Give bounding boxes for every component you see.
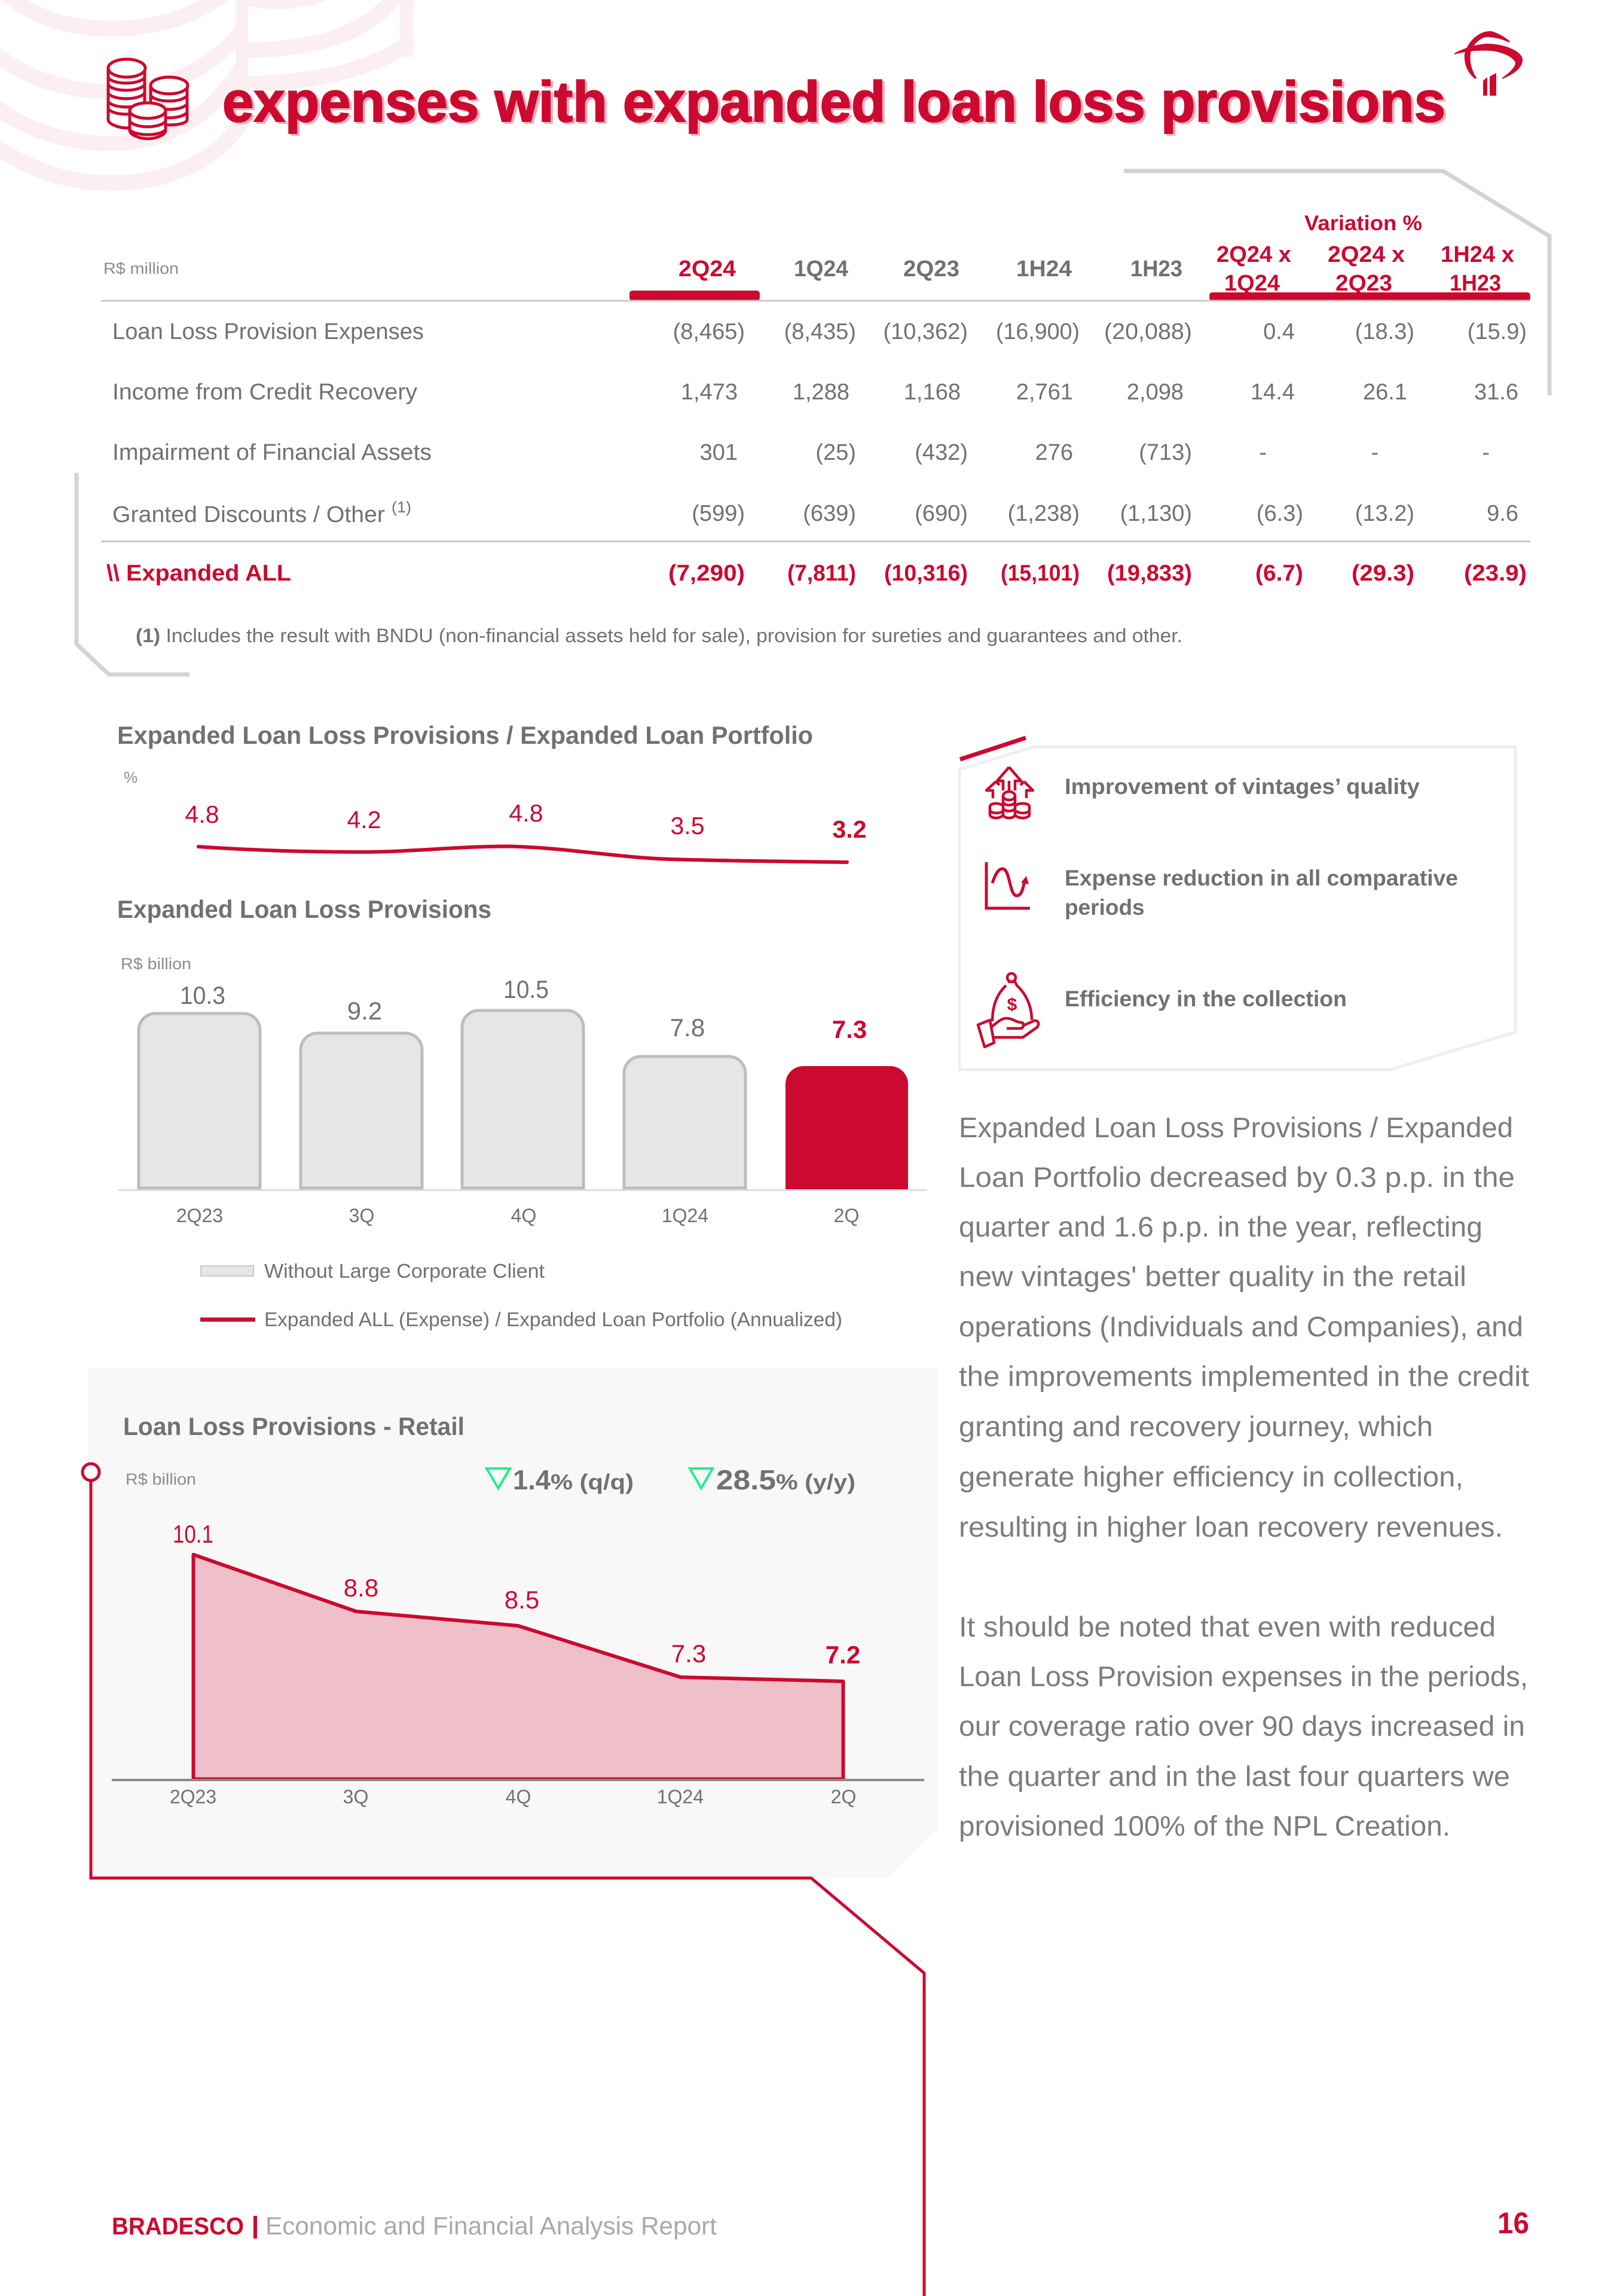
row: loan loss provision expenses: (20,088)	[1104, 319, 1192, 344]
row: loan loss provision expenses: (16,900)	[996, 319, 1080, 344]
row: loan loss provision expenses: (8,435)	[784, 319, 856, 344]
row: income from credit recovery: 14.4	[1251, 380, 1295, 405]
bar chart: expanded loan loss provisions: R$ billion	[121, 955, 191, 973]
text block: analysis paragraph one: Expanded Loan Loss Provisions / Expanded	[959, 1112, 1513, 1143]
text block: analysis paragraph one: quarter and 1.6 p.p. in the year, reflecting	[959, 1211, 1483, 1242]
bar chart: expanded loan loss provisions: 10.5	[503, 975, 549, 1003]
row: income from credit recovery: Income from Credit Recovery	[112, 380, 417, 405]
logo: Bradesco tree mark	[1454, 31, 1523, 96]
chart heading: expanded loan loss provisions: Expanded Loan Loss Provisions	[117, 895, 491, 923]
variation q/q: 1.4	[513, 1464, 551, 1495]
area chart: retail provisions: 2Q23	[170, 1786, 216, 1808]
row: impairment of financial assets: Impairment of Financial Assets	[112, 440, 432, 465]
area chart: retail provisions	[112, 1520, 924, 1808]
row: loan loss provision expenses: Loan Loss Provision Expenses	[112, 319, 424, 344]
row: granted discounts / other: (639)	[803, 501, 856, 526]
row: granted discounts / other	[112, 498, 1518, 527]
legend: Without Large Corporate Client	[264, 1260, 545, 1282]
table header: 1H23	[1130, 257, 1182, 282]
text block: analysis paragraph one: Loan Portfolio decreased by 0.3 p.p. in the	[959, 1161, 1515, 1193]
bar chart: expanded loan loss provisions: 7.3	[832, 1015, 867, 1043]
area chart: retail provisions: 3Q	[343, 1786, 368, 1808]
line chart: ratio percent: 4.2	[347, 806, 381, 833]
table header: 2Q23	[903, 257, 959, 282]
footer: Economic and Financial Analysis Report	[265, 2212, 717, 2240]
area chart: retail provisions: 4Q	[506, 1786, 531, 1808]
row: income from credit recovery: 31.6	[1474, 380, 1518, 405]
text block: analysis paragraph one: operations (Individuals and Companies), and	[959, 1311, 1523, 1342]
area chart: retail provisions: 10.1	[173, 1520, 213, 1548]
decorative grey corner frame, bottom left	[77, 473, 189, 674]
row: loan loss provision expenses: (18.3)	[1355, 319, 1414, 344]
row: granted discounts / other: 9.6	[1487, 501, 1518, 526]
row: income from credit recovery: 1,288	[793, 380, 849, 405]
text: improvement of vintages' quality: Improvement of vintages’ quality	[1065, 774, 1420, 799]
row: income from credit recovery: 1,473	[681, 380, 738, 405]
text block: analysis paragraph one: the improvements implemented in the credit	[959, 1360, 1529, 1392]
chart heading: provisions over portfolio: Expanded Loan Loss Provisions / Expanded Loan Portfolio	[117, 721, 813, 749]
row: expanded ALL total: (23.9)	[1464, 561, 1527, 586]
text block: analysis paragraph one: granting and recovery journey, which	[959, 1410, 1433, 1442]
area chart: retail provisions: 8.5	[505, 1586, 539, 1614]
panel: loan loss provisions retail	[88, 1368, 939, 1878]
line chart: ratio percent	[124, 768, 867, 862]
row: granted discounts / other: (599)	[692, 501, 745, 526]
row: impairment of financial assets: 301	[700, 440, 738, 465]
red connector line with circle marker	[82, 1464, 924, 2296]
text block: analysis paragraph two: provisioned 100% of the NPL Creation.	[959, 1810, 1450, 1842]
row: impairment of financial assets: -	[1259, 440, 1267, 465]
footnote: (1) Includes the result with BNDU (non-financial assets held for sale), provision for sureties and guarantees and other.	[136, 625, 1182, 646]
row: income from credit recovery: 1,168	[904, 380, 961, 405]
decorative grey corner frame, top right	[1124, 171, 1549, 395]
bar chart: expanded loan loss provisions: 1Q24	[662, 1205, 708, 1226]
text block: analysis paragraph two: It should be noted that even with reduced	[959, 1611, 1496, 1642]
variation y/y	[690, 1464, 855, 1495]
row: granted discounts / other: (1)	[392, 498, 411, 516]
row: granted discounts / other: (13.2)	[1355, 501, 1414, 526]
row: expanded ALL total: \\ Expanded ALL	[106, 561, 291, 586]
line chart: ratio percent: 3.2	[832, 816, 867, 843]
line chart: ratio percent: 3.5	[671, 812, 704, 839]
row: granted discounts / other: Granted Discounts / Other	[112, 502, 385, 527]
text block: analysis paragraph one	[959, 1112, 1529, 1543]
row: expanded ALL total: (10,316)	[884, 561, 968, 586]
text block: analysis paragraph one: generate higher efficiency in collection,	[959, 1461, 1463, 1492]
variation y/y: % (y/y)	[776, 1470, 855, 1494]
bar chart: expanded loan loss provisions: 3Q	[349, 1205, 374, 1226]
icon: stacks of coins	[108, 59, 188, 139]
row: impairment of financial assets: 276	[1035, 440, 1073, 465]
row: impairment of financial assets: (713)	[1139, 440, 1192, 465]
table header: 1H24 x	[1441, 242, 1514, 267]
footer: BRADESCO	[112, 2212, 244, 2240]
text: expense reduction: periods	[1065, 895, 1145, 920]
table header: 2Q24	[678, 257, 736, 282]
bar chart: expanded loan loss provisions: 2Q	[834, 1205, 859, 1226]
row: granted discounts / other: (1,130)	[1120, 501, 1192, 526]
table header: 2Q24 x	[1216, 242, 1291, 267]
table: expanded loan loss provision expenses	[101, 212, 1530, 646]
row: expanded ALL total: (6.7)	[1255, 561, 1303, 586]
row: impairment of financial assets: -	[1482, 440, 1490, 465]
row: loan loss provision expenses: (15.9)	[1468, 319, 1527, 344]
text block: analysis paragraph one: resulting in higher loan recovery revenues.	[959, 1511, 1503, 1543]
row: expanded ALL total: (7,290)	[668, 561, 745, 586]
legend: Expanded ALL (Expense) / Expanded Loan Portfolio (Annualized)	[264, 1308, 842, 1330]
title: expenses with expanded loan loss provisions	[222, 70, 1445, 134]
variation y/y: 28.5	[716, 1464, 776, 1495]
row: impairment of financial assets	[112, 440, 1490, 465]
table header	[101, 212, 1530, 301]
row: impairment of financial assets: -	[1371, 440, 1378, 465]
bar chart: expanded loan loss provisions	[118, 955, 927, 1226]
text: efficiency in the collection: Efficiency in the collection	[1065, 987, 1347, 1011]
row: loan loss provision expenses: (10,362)	[883, 319, 968, 344]
page number: 16	[1497, 2206, 1529, 2240]
icon: coins with up arrows	[986, 767, 1033, 818]
text block: analysis paragraph two: Loan Loss Provision expenses in the periods,	[959, 1660, 1528, 1692]
row: expanded ALL total: (29.3)	[1352, 561, 1414, 586]
table header: 2Q23	[1335, 271, 1392, 296]
row: income from credit recovery: 2,098	[1127, 380, 1184, 405]
legend	[200, 1260, 842, 1330]
row: loan loss provision expenses	[112, 319, 1527, 344]
table header: 1H24	[1016, 257, 1072, 282]
icon: line chart with rebound arrow	[986, 862, 1030, 908]
heading: retail: Loan Loss Provisions - Retail	[123, 1412, 464, 1440]
variation q/q: % (q/q)	[551, 1470, 634, 1494]
text block: analysis paragraph one: new vintages' better quality in the retail	[959, 1260, 1466, 1292]
row: loan loss provision expenses: 0.4	[1263, 319, 1295, 344]
text block: analysis paragraph two	[959, 1611, 1528, 1842]
row: impairment of financial assets: (25)	[815, 440, 856, 465]
area chart: retail provisions: 8.8	[344, 1574, 378, 1602]
row: expanded ALL total: (19,833)	[1107, 561, 1192, 586]
row: expanded ALL total: (7,811)	[787, 561, 856, 586]
area chart: retail provisions: 7.3	[671, 1639, 706, 1668]
table header: Variation %	[1304, 212, 1422, 235]
table header: 1Q24	[794, 257, 848, 282]
row: impairment of financial assets: (432)	[915, 440, 968, 465]
icon: money bag over open hand	[978, 973, 1038, 1047]
background decoration: pale coin stack arcs	[0, 0, 406, 183]
row: expanded ALL total: (15,101)	[1001, 561, 1080, 586]
unit label: R$ billion	[126, 1470, 196, 1488]
table header: 1H23	[1450, 271, 1501, 296]
table header: 1Q24	[1224, 271, 1280, 296]
line chart: ratio percent: 4.8	[509, 799, 543, 827]
row: granted discounts / other: (6.3)	[1257, 501, 1303, 526]
bar chart: expanded loan loss provisions: 7.8	[670, 1013, 705, 1042]
row: expanded ALL total	[106, 561, 1527, 586]
text: expense reduction: Expense reduction in all comparative	[1065, 866, 1458, 890]
area chart: retail provisions: 1Q24	[657, 1786, 704, 1808]
bar chart: expanded loan loss provisions: 2Q23	[176, 1205, 223, 1226]
area chart: retail provisions: 7.2	[826, 1641, 860, 1669]
row: income from credit recovery: 2,761	[1016, 380, 1073, 405]
line chart: ratio percent: 4.8	[185, 801, 219, 828]
text block: analysis paragraph two: our coverage ratio over 90 days increased in	[959, 1710, 1525, 1742]
line chart: ratio percent: %	[124, 768, 137, 786]
row: loan loss provision expenses: (8,465)	[673, 319, 745, 344]
table header: R$ million	[103, 259, 179, 277]
variation q/q	[487, 1464, 634, 1495]
bar chart: expanded loan loss provisions: 4Q	[511, 1205, 536, 1226]
panel: key drivers	[959, 738, 1515, 1070]
bar chart: expanded loan loss provisions: 10.3	[180, 981, 225, 1009]
row: granted discounts / other: (1,238)	[1008, 501, 1080, 526]
icon: money bag over open hand: $	[1007, 995, 1017, 1015]
row: income from credit recovery: 26.1	[1363, 380, 1407, 405]
row: granted discounts / other: (690)	[915, 501, 968, 526]
table header: 2Q24 x	[1328, 242, 1405, 267]
row: income from credit recovery	[112, 380, 1518, 405]
text block: analysis paragraph two: the quarter and in the last four quarters we	[959, 1760, 1510, 1792]
area chart: retail provisions: 2Q	[831, 1786, 856, 1808]
bar chart: expanded loan loss provisions: 9.2	[347, 997, 382, 1025]
